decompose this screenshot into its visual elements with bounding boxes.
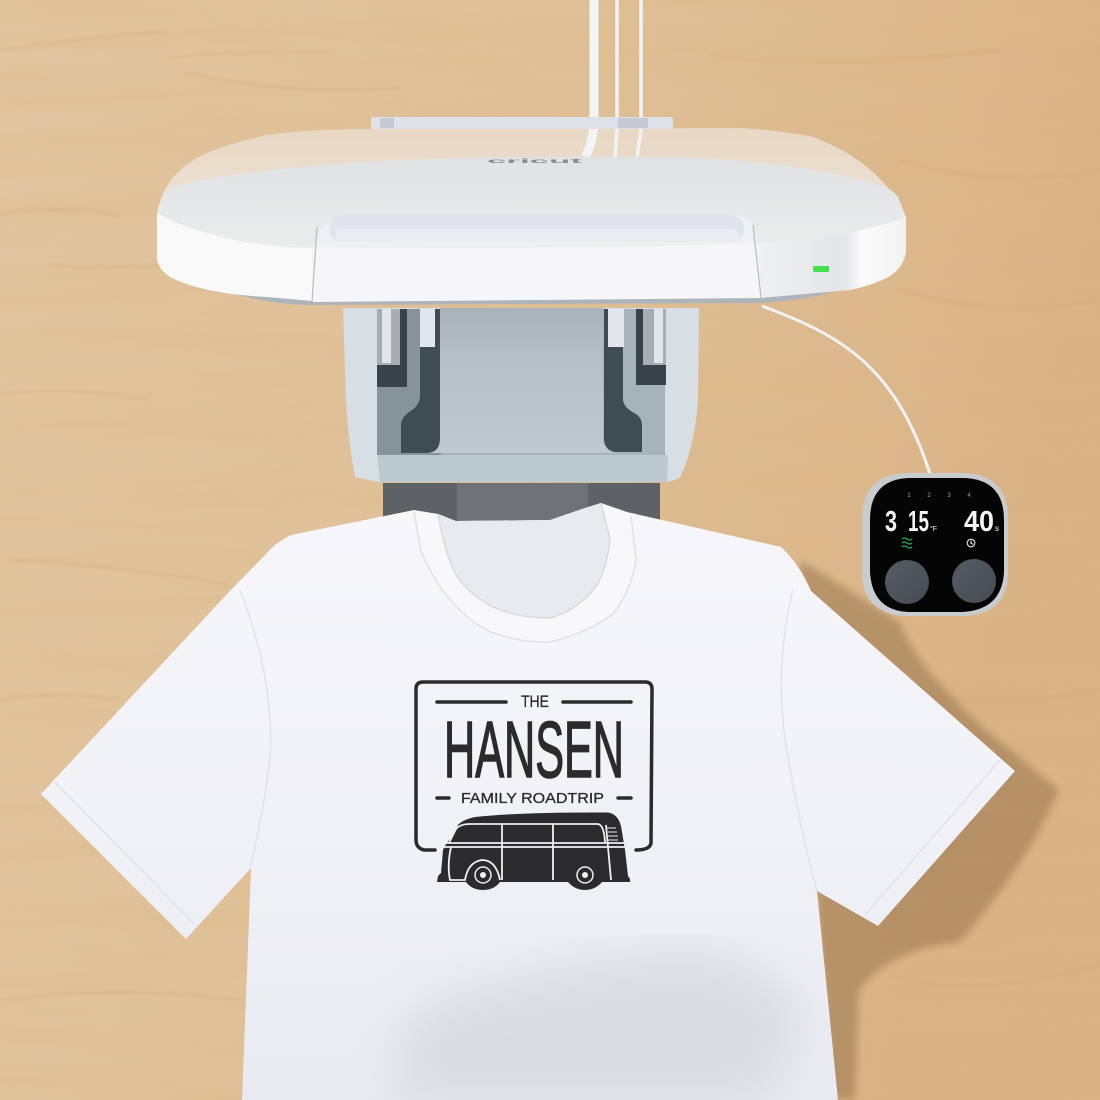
cable to controller xyxy=(762,306,930,474)
white T-shirt xyxy=(41,503,1015,1100)
icon: heat waves xyxy=(902,538,912,548)
press lid top main xyxy=(157,157,906,255)
control panel xyxy=(862,473,1008,616)
brand wordmark: cricut xyxy=(487,158,582,165)
time readout: 40 xyxy=(964,506,994,538)
temperature readout: 3 xyxy=(885,506,897,538)
design outline frame xyxy=(416,682,652,850)
shadow cast by the T-shirt xyxy=(800,560,1059,1100)
sleeve seams xyxy=(55,590,1000,925)
printed design xyxy=(416,682,652,890)
temperature readout xyxy=(885,506,937,538)
temperature knob xyxy=(885,560,929,604)
preset numbers: 1 xyxy=(907,493,911,499)
front panel xyxy=(312,215,761,302)
design subheading: FAMILY ROADTRIP xyxy=(461,790,604,807)
preset numbers: 3 xyxy=(947,493,951,499)
soft shadow on shirt xyxy=(398,950,802,1100)
right slot xyxy=(604,309,642,452)
center plate xyxy=(428,308,616,453)
preset numbers xyxy=(907,493,971,499)
preset numbers: 4 xyxy=(967,493,971,499)
time readout: s xyxy=(995,524,999,533)
status LED xyxy=(813,266,829,272)
van illustration xyxy=(437,812,630,890)
handle recess xyxy=(329,215,744,242)
lid underside rim xyxy=(197,270,850,305)
temperature readout: °F xyxy=(930,525,937,533)
shirt body and sleeves xyxy=(41,503,1015,1100)
preset numbers: 2 xyxy=(927,493,931,499)
grey base platen xyxy=(383,483,660,523)
design heading: THE: THE xyxy=(521,692,549,711)
inside back of neck xyxy=(438,503,610,618)
top rules xyxy=(437,702,631,798)
lower body housing xyxy=(343,308,699,482)
design heading: HANSEN: HANSEN xyxy=(444,705,624,794)
right side face xyxy=(759,217,906,298)
icon: clock xyxy=(967,539,975,547)
rear cable bar xyxy=(371,117,673,129)
power and accessory cables xyxy=(585,0,641,157)
press lid top back xyxy=(157,128,906,255)
left slot xyxy=(401,309,440,453)
collar ribbing xyxy=(414,503,636,642)
left side face xyxy=(157,213,313,301)
heat press machine xyxy=(157,0,906,523)
temperature readout: 15 xyxy=(908,506,929,538)
time knob xyxy=(952,559,996,603)
